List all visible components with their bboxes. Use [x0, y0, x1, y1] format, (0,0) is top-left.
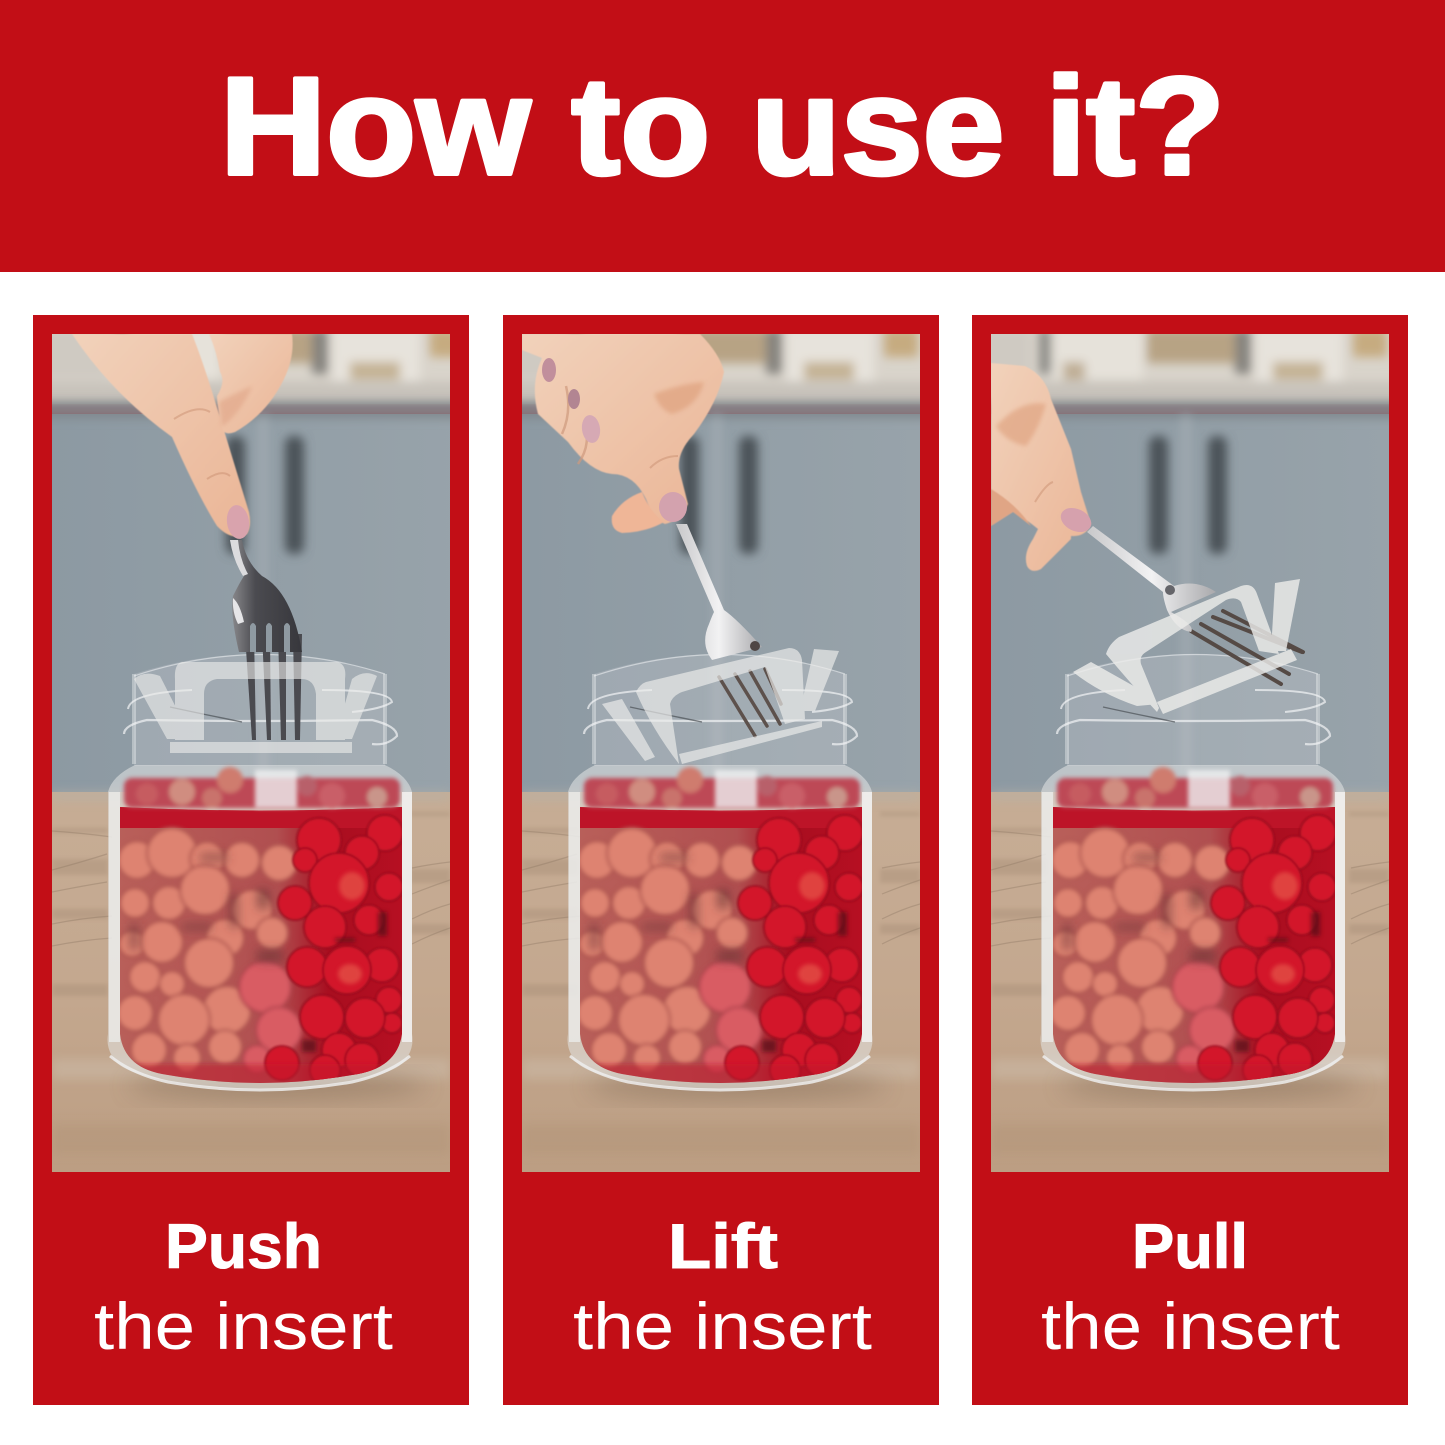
- panel: lift: [492, 315, 962, 1405]
- hand: [991, 363, 1091, 571]
- caption: push: the insert: [94, 1289, 393, 1363]
- hand: fingers: [72, 334, 293, 537]
- insert: [1073, 579, 1300, 714]
- fork tines: [245, 634, 302, 740]
- insert: [602, 648, 839, 764]
- nail: [227, 505, 249, 539]
- photo: hand lifting the insert with a fork: [522, 334, 920, 1172]
- caption: pull: Pull: [1132, 1212, 1248, 1282]
- title: How to use it?: [220, 49, 1225, 204]
- caption: pull: the insert: [1041, 1289, 1340, 1363]
- fork tines: [1191, 611, 1303, 684]
- panel: pull: [961, 315, 1431, 1405]
- fork: [676, 524, 762, 660]
- caption: pull: [1041, 1212, 1340, 1363]
- fork head: [230, 540, 302, 652]
- caption: lift: Lift: [668, 1212, 778, 1282]
- panel: push: [33, 315, 508, 1405]
- fork tines: [719, 669, 781, 736]
- caption: lift: [573, 1212, 872, 1363]
- header banner: [0, 0, 1445, 272]
- nail: [1060, 508, 1092, 532]
- caption: lift: the insert: [573, 1289, 872, 1363]
- nails: [542, 358, 556, 382]
- insert: [134, 662, 377, 753]
- caption: push: Push: [165, 1212, 322, 1282]
- photo: hand pushing the insert with a fork: [52, 334, 450, 1172]
- caption: push: [94, 1212, 393, 1363]
- hand: [522, 334, 724, 533]
- photo: hand pulling the insert with a fork: [991, 334, 1389, 1172]
- fork: [1087, 526, 1216, 632]
